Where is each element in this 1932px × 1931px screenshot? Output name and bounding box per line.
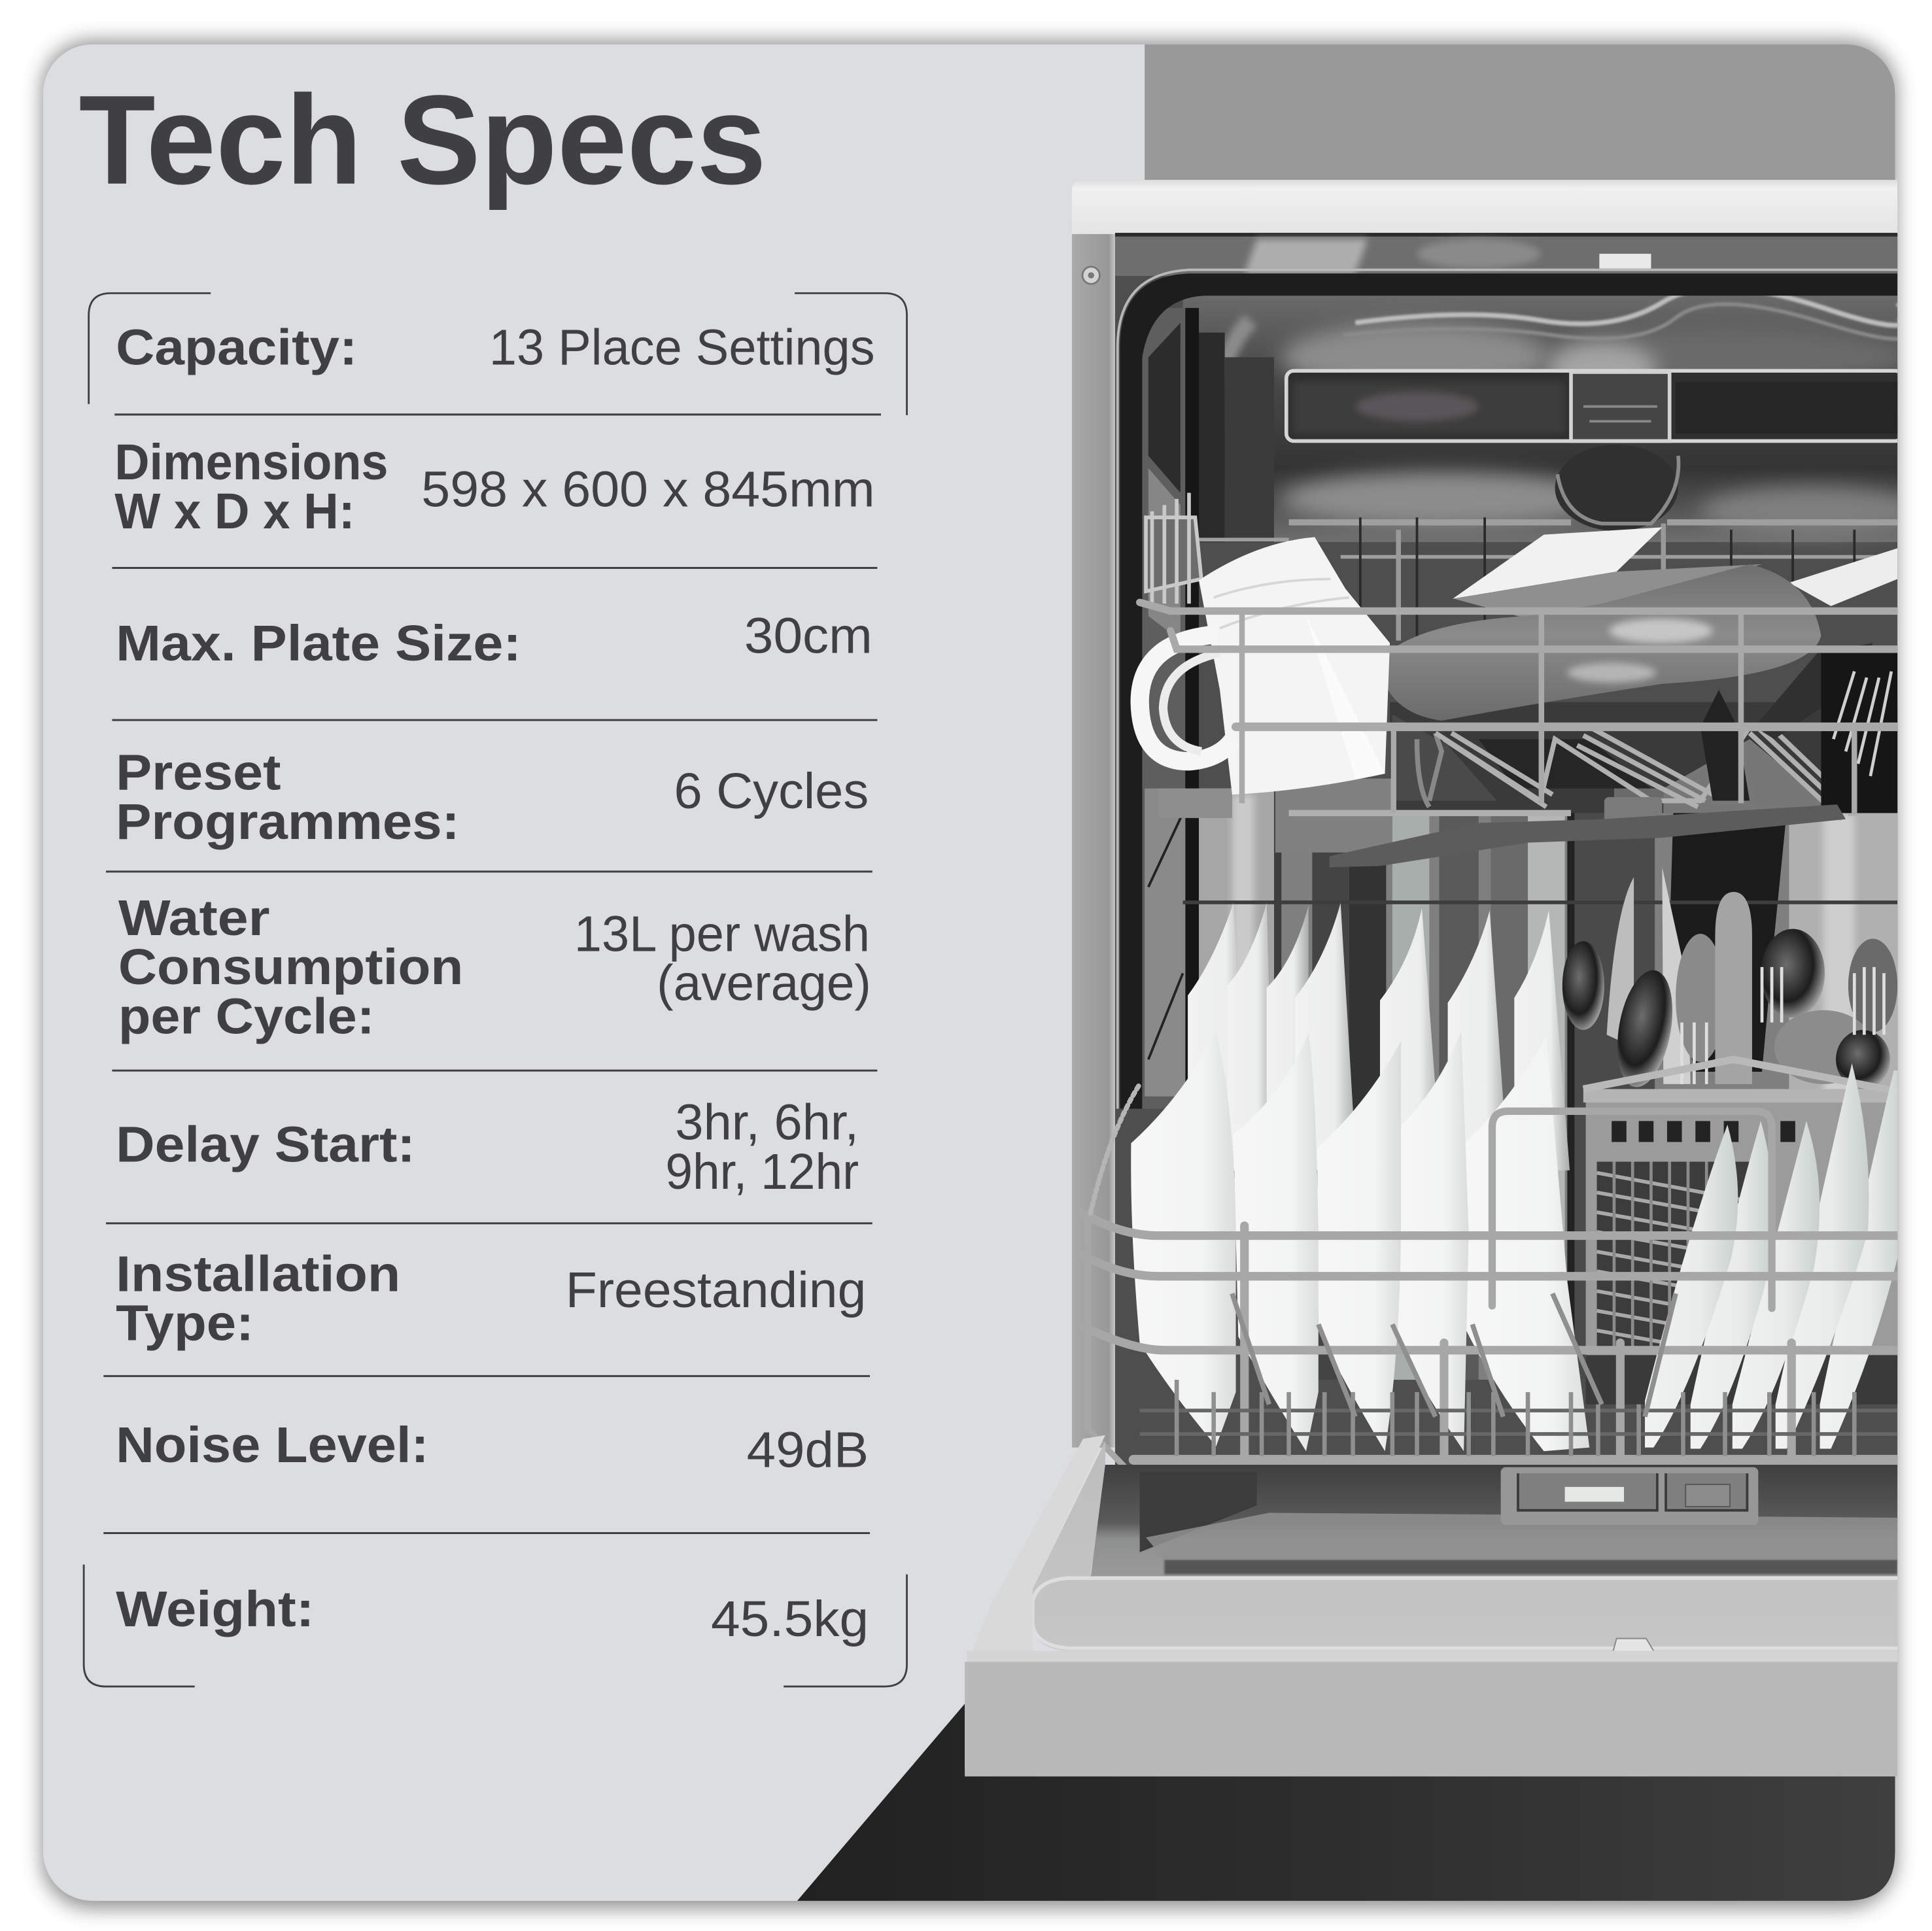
flat plates in upper rack (1453, 527, 1897, 622)
row: weight (116, 1581, 869, 1647)
row: delay start: 3hr, 6hr, (675, 1095, 859, 1151)
row: water: per Cycle: (118, 989, 375, 1045)
open door inner tray (1033, 1441, 1897, 1650)
divider 3 (112, 719, 877, 721)
rinse-aid dispenser (1501, 1467, 1758, 1525)
door rim (967, 1650, 1897, 1663)
cutlery basket (1583, 1089, 1897, 1405)
title: Tech Specs (79, 69, 767, 211)
row: weight: 45.5kg (711, 1591, 869, 1647)
door lock clip (1612, 1639, 1657, 1657)
cutlery: knives, spoons and forks (1562, 867, 1897, 1091)
left wall reflections (1142, 308, 1281, 1115)
row: dimensions: 598 x 600 x 845mm (421, 461, 875, 517)
row: capacity: Capacity: (116, 320, 357, 376)
row: water: 13L per wash (574, 906, 870, 962)
row: weight: Weight: (116, 1581, 314, 1637)
row: water: Water (118, 890, 270, 946)
floor details (1140, 1472, 1897, 1575)
row: capacity (116, 320, 875, 376)
left side frame (1072, 234, 1115, 1448)
divider 2 (112, 567, 877, 568)
dark utensil and pan handle (1700, 643, 1897, 813)
right-leaning plates (1645, 1063, 1904, 1448)
white stacked cups (1140, 537, 1390, 795)
door front panel (965, 1662, 1897, 1777)
row: programmes (116, 745, 869, 850)
door seal gasket (1120, 273, 1897, 1109)
interior top band (1115, 233, 1897, 276)
divider 7 (103, 1375, 870, 1376)
floor of tub (1090, 1465, 1897, 1579)
row: plate size (116, 607, 872, 672)
row: capacity: 13 Place Settings (489, 320, 875, 376)
top bracket right (795, 293, 907, 415)
panel: dark floor wedge (797, 1703, 1895, 1901)
upper rack front wires (1140, 602, 1897, 813)
divider 5 (112, 1070, 877, 1071)
illustration: dishwasher (965, 180, 1922, 1777)
row: installation: Freestanding (566, 1262, 866, 1318)
row: installation: Type: (116, 1295, 254, 1352)
row: water (118, 890, 871, 1045)
bottom bracket right (784, 1575, 907, 1686)
divider 6 (106, 1223, 872, 1224)
counter top of dishwasher (1072, 180, 1897, 234)
row: programmes: 6 Cycles (674, 763, 869, 819)
seal highlight (1118, 270, 1897, 1109)
row: noise: 49dB (747, 1422, 869, 1478)
bottom bracket left (84, 1565, 195, 1686)
row: dimensions: Dimensions (114, 434, 388, 490)
row: installation (116, 1246, 866, 1352)
lower rack wire frame (1080, 1084, 1897, 1484)
divider 1 (114, 414, 881, 415)
frying pan (1380, 564, 1821, 721)
row: installation: Installation (116, 1246, 400, 1302)
front row plates (1131, 1031, 1589, 1451)
row: plate size: 30cm (744, 607, 872, 664)
row: dimensions: W x D x H: (114, 483, 355, 539)
door side rail (967, 1435, 1105, 1663)
cutlery rail on back wall (1286, 371, 1903, 441)
dishwasher interior base (1115, 234, 1897, 1466)
row: noise (116, 1417, 869, 1478)
row: plate size: Max. Plate Size: (116, 615, 521, 672)
spray arm (1330, 797, 1846, 867)
row: dimensions (114, 434, 875, 539)
row: programmes: Programmes: (116, 794, 460, 850)
row: water: Consumption (118, 939, 463, 995)
panel: mid grey top band (1145, 44, 1895, 180)
door rim lines (1033, 1578, 1897, 1649)
top bracket left (89, 293, 211, 404)
row: delay start: Delay Start: (116, 1117, 415, 1173)
row: delay start: 9hr, 12hr (665, 1144, 859, 1200)
divider 4 (106, 871, 872, 872)
row: programmes: Preset (116, 745, 281, 801)
back row plates (1188, 903, 1570, 1171)
upper rack side tines (1146, 493, 1201, 604)
under upper rack dark zone (1158, 702, 1897, 853)
row: delay start (116, 1095, 859, 1200)
upper rack back wires (1199, 517, 1897, 641)
divider 8 (103, 1533, 870, 1534)
lower zigzag wires of upper rack (1289, 721, 1897, 819)
lower rack bottom wires and tines (1140, 1293, 1897, 1456)
row: noise: Noise Level: (116, 1417, 429, 1473)
spec table (84, 293, 907, 1686)
back wall reflections (1183, 288, 1922, 542)
row: water: (average) (657, 955, 871, 1012)
tall lower tub background (1183, 801, 1900, 1380)
